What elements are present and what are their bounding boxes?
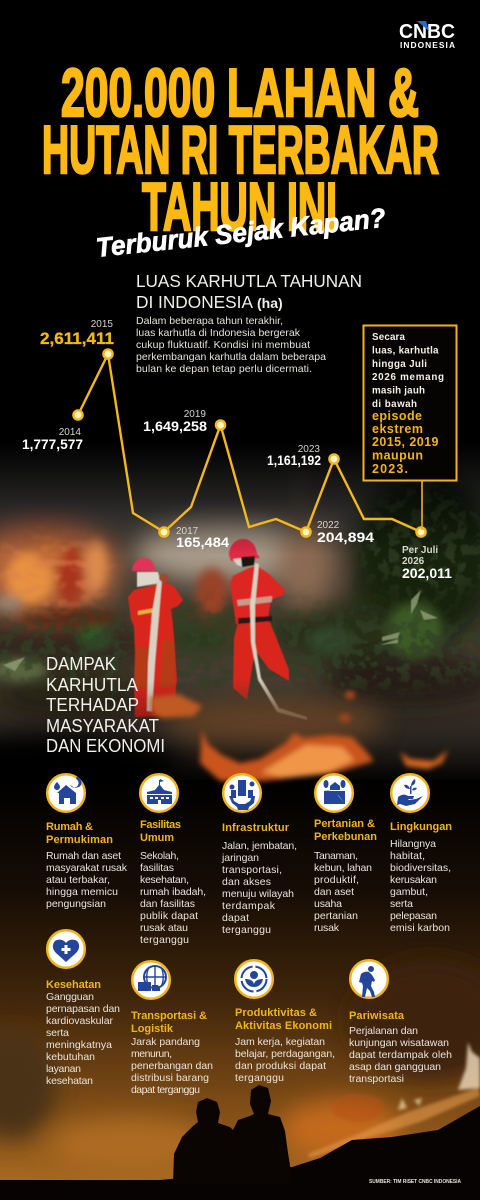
panel: Rumah & Permukiman	[46, 774, 128, 910]
panel: Fasilitas Umum: Umum	[140, 832, 174, 844]
data label per Juli 2026	[402, 545, 452, 581]
callout box	[364, 326, 456, 530]
panel: Kesehatan: serta	[46, 1027, 69, 1039]
panel: Lingkungan: pelepasan	[390, 910, 437, 922]
data label 2015	[40, 319, 114, 348]
chart heading: (ha)	[257, 295, 283, 311]
panel: Fasilitas Umum: Fasilitas	[140, 819, 181, 831]
chart description: luas karhutla di Indonesia bergerak	[136, 327, 301, 339]
callout box: hingga Juli	[372, 359, 427, 370]
panel: Produktivitas & Aktivitas Ekonomi: Produktivitas &	[235, 1007, 317, 1019]
panel: Lingkungan: biodiversitas,	[390, 862, 451, 874]
title	[42, 55, 439, 245]
panel: Rumah & Permukiman: pengungsian	[46, 898, 106, 910]
panel: Pertanian & Perkebunan: Tanaman,	[314, 850, 358, 862]
panel: Produktivitas & Aktivitas Ekonomi: dan produksi dapat	[235, 1060, 326, 1072]
icon: hiker with backpack	[350, 960, 388, 998]
icon: globe and truck	[132, 961, 170, 999]
data label per Juli 2026: 2026	[402, 556, 425, 567]
icon: economic cycle	[235, 960, 273, 998]
panel: Transportasi & Logistik	[131, 961, 213, 1096]
panel: Fasilitas Umum: kesehatan,	[140, 874, 189, 886]
data label 2017: 2017	[176, 526, 199, 537]
panel: Pertanian & Perkebunan: pertanian	[314, 910, 358, 922]
section heading: impacts: DAMPAK	[46, 654, 116, 674]
chart description: Dalam beberapa tahun terakhir,	[136, 315, 283, 327]
background photo: forest fire scene	[0, 440, 480, 785]
panel: Pertanian & Perkebunan: usaha	[314, 898, 342, 910]
panel: Produktivitas & Aktivitas Ekonomi	[235, 960, 335, 1084]
panel: Rumah & Permukiman: Rumah dan aset	[46, 850, 121, 862]
panel: Transportasi & Logistik: distribusi barang	[131, 1072, 209, 1084]
panel: Kesehatan	[46, 930, 120, 1087]
section heading: impacts: DAN EKONOMI	[46, 736, 165, 756]
panel: Pariwisata: transportasi	[349, 1073, 404, 1085]
panel: Rumah & Permukiman: Permukiman	[46, 834, 113, 846]
panel: Infrastruktur: dan akses	[222, 876, 271, 888]
panel: Transportasi & Logistik: penerbangan dan	[131, 1060, 213, 1072]
panel: Transportasi & Logistik: dapat terganggu	[131, 1084, 200, 1096]
data label 2019	[143, 409, 207, 434]
data label 2014: 1,777,577	[22, 436, 83, 452]
data label 2022	[317, 520, 374, 545]
data label 2023	[267, 444, 321, 468]
panel: Pertanian & Perkebunan: kebun, lahan	[314, 862, 372, 874]
panel: Fasilitas Umum: terganggu	[140, 934, 189, 946]
panel: Rumah & Permukiman: masyarakat rusak	[46, 862, 128, 874]
chart description: bulan ke depan tetap perlu dicermati.	[136, 363, 312, 375]
source credit: SUMBER: TIM RISET CNBC INDONESIA	[369, 1179, 461, 1185]
chart description: cukup fluktuatif. Kondisi ini membuat	[136, 339, 310, 351]
panel: Fasilitas Umum: rusak atau	[140, 922, 188, 934]
icon: city and gear	[223, 774, 261, 812]
panel: Pertanian & Perkebunan	[314, 774, 377, 934]
panel: Fasilitas Umum: fasilitas	[140, 862, 174, 874]
panel: Infrastruktur: menuju wilayah	[222, 888, 294, 900]
callout box: 2023.	[372, 462, 408, 476]
panel: Rumah & Permukiman: Rumah &	[46, 821, 93, 833]
section heading: impacts: TERHADAP	[46, 695, 139, 715]
panel: Kesehatan: pernapasan dan	[46, 1003, 120, 1015]
warm smoke above flames	[165, 698, 385, 746]
panel: Rumah & Permukiman: hingga memicu	[46, 886, 118, 898]
panel: Lingkungan: kerusakan	[390, 874, 437, 886]
callout box: maupun	[372, 448, 423, 462]
panel: Kesehatan: Kesehatan	[46, 979, 101, 991]
panel: Produktivitas & Aktivitas Ekonomi: Jam kerja, kegiatan	[235, 1036, 325, 1048]
lower background: smoky orange glow	[0, 780, 480, 1180]
panel: Fasilitas Umum: dan fasilitas	[140, 898, 195, 910]
panel: Produktivitas & Aktivitas Ekonomi: terganggu	[235, 1072, 284, 1084]
panel: Infrastruktur: transportasi,	[222, 864, 282, 876]
icon: school building	[140, 774, 178, 812]
panel: Kesehatan: kesehatan	[46, 1075, 93, 1087]
distant burning ridge	[308, 1042, 480, 1158]
icon: plant on hand	[391, 774, 429, 812]
panel: Pariwisata	[349, 960, 452, 1085]
icon: farm fields	[315, 774, 353, 812]
panel: Pariwisata: Pariwisata	[349, 1010, 405, 1022]
panel: Infrastruktur: Jalan, jembatan,	[222, 840, 297, 852]
icon: heart with cross	[47, 930, 85, 968]
panel: Lingkungan: gambut,	[390, 886, 428, 898]
data label 2014: 2014	[59, 427, 81, 438]
panel: Fasilitas Umum: Sekolah,	[140, 850, 179, 862]
left dark corner	[0, 734, 180, 806]
panel: Kesehatan: meningkatnya	[46, 1039, 112, 1051]
data label 2014	[22, 427, 83, 452]
panel: Pariwisata: kunjungan wisatawan	[349, 1037, 449, 1049]
panel: Lingkungan	[390, 774, 452, 934]
panel: Pariwisata: Perjalanan dan	[349, 1025, 418, 1037]
data label per Juli 2026: 202,011	[402, 565, 452, 581]
panel: Produktivitas & Aktivitas Ekonomi: Aktivitas Ekonomi	[235, 1020, 332, 1032]
chart description	[136, 315, 326, 375]
firefighter left	[128, 558, 183, 717]
chart heading: DI INDONESIA	[136, 292, 253, 312]
hill and ground silhouette	[0, 1106, 480, 1200]
data label 2015: 2015	[91, 319, 113, 330]
panel: Kesehatan: kebutuhan	[46, 1051, 95, 1063]
panel: Kesehatan: kardiovaskular	[46, 1015, 114, 1027]
panel: Infrastruktur: terdampak	[222, 900, 276, 912]
panel: Pertanian & Perkebunan: rusak	[314, 922, 340, 934]
callout box: 2026 memang	[372, 372, 444, 383]
panel: Transportasi & Logistik: menurun,	[131, 1048, 172, 1060]
icon: house	[47, 774, 85, 812]
data label 2019: 1,649,258	[143, 418, 207, 434]
flames on ground	[150, 691, 448, 781]
callout box: di bawah	[372, 399, 417, 410]
panel: Rumah & Permukiman: atau terbakar,	[46, 874, 110, 886]
panel: Transportasi & Logistik: Logistik	[131, 1023, 174, 1035]
panel: Transportasi & Logistik: Transportasi &	[131, 1010, 207, 1022]
silhouettes: two seated people	[173, 1085, 293, 1184]
panel: Kesehatan: layanan	[46, 1063, 81, 1075]
data label 2017: 165,484	[176, 534, 229, 550]
chart heading: LUAS KARHUTLA TAHUNAN	[136, 271, 362, 291]
panel: Lingkungan: Lingkungan	[390, 821, 452, 833]
callout box: Secara	[372, 332, 406, 343]
line chart: annual burned area	[73, 349, 426, 537]
callout box: ekstrem	[372, 422, 423, 436]
bottom fade of photo	[0, 680, 480, 785]
panel: Pariwisata: dapat terdampak oleh	[349, 1049, 452, 1061]
panel: Pertanian & Perkebunan: Perkebunan	[314, 831, 377, 843]
logo: CNBC Indonesia: CNBC	[399, 20, 455, 43]
panel: Lingkungan: Hilangnya	[390, 838, 436, 850]
chart description: perkembangan karhutla dalam beberapa	[136, 351, 326, 363]
panel: Lingkungan: habitat,	[390, 850, 425, 862]
section heading: impacts	[46, 654, 165, 756]
logo: CNBC Indonesia: INDONESIA	[400, 40, 455, 50]
panel: Infrastruktur: Infrastruktur	[222, 822, 290, 834]
panel: Infrastruktur: dapat	[222, 912, 249, 924]
title: TAHUN INI	[142, 169, 337, 245]
firefighter right	[229, 539, 307, 720]
data label 2022: 2022	[317, 520, 340, 531]
callout box: luas, karhutla	[372, 346, 439, 356]
panel: Pertanian & Perkebunan: Pertanian &	[314, 818, 375, 830]
panel: Lingkungan: serta	[390, 898, 413, 910]
chart heading	[136, 271, 362, 312]
data label 2019: 2019	[184, 409, 206, 420]
data label 2023: 1,161,192	[267, 452, 321, 468]
panel: Pertanian & Perkebunan: dan aset	[314, 886, 354, 898]
section heading: impacts: MASYARAKAT	[46, 716, 159, 736]
callout box: 2015, 2019	[372, 435, 439, 449]
data label 2023: 2023	[298, 444, 320, 455]
panel: Fasilitas Umum: publik dapat	[140, 910, 198, 922]
callout box: episode	[372, 409, 422, 423]
panel: Infrastruktur: terganggu	[222, 924, 271, 936]
foliage at right and left	[3, 590, 438, 671]
data label 2015: 2,611,411	[40, 329, 114, 348]
panel: Fasilitas Umum: rumah ibadah,	[140, 886, 206, 898]
panel: Transportasi & Logistik: Jarak pandang	[131, 1036, 200, 1048]
panel: Pariwisata: asap dan gangguan	[349, 1061, 441, 1073]
top fade of photo into black	[0, 395, 480, 555]
callout box: masih jauh	[372, 386, 425, 396]
section heading: impacts: KARHUTLA	[46, 675, 138, 695]
panel: Fasilitas Umum	[140, 774, 206, 946]
subtitle: Terburuk Sejak Kapan?	[94, 203, 387, 263]
data label 2022: 204,894	[317, 529, 374, 545]
panel: Kesehatan: Gangguan	[46, 991, 94, 1003]
foliage texture	[0, 494, 480, 690]
data label per Juli 2026: Per Juli	[402, 545, 438, 556]
data label 2017	[176, 526, 229, 550]
panel: Lingkungan: emisi karbon	[390, 922, 450, 934]
panel: Infrastruktur: jaringan	[221, 852, 259, 864]
panel: Produktivitas & Aktivitas Ekonomi: belajar, perdagangan,	[235, 1048, 335, 1060]
panel: Infrastruktur	[221, 774, 297, 936]
panel: Pertanian & Perkebunan: produktif,	[314, 874, 359, 886]
